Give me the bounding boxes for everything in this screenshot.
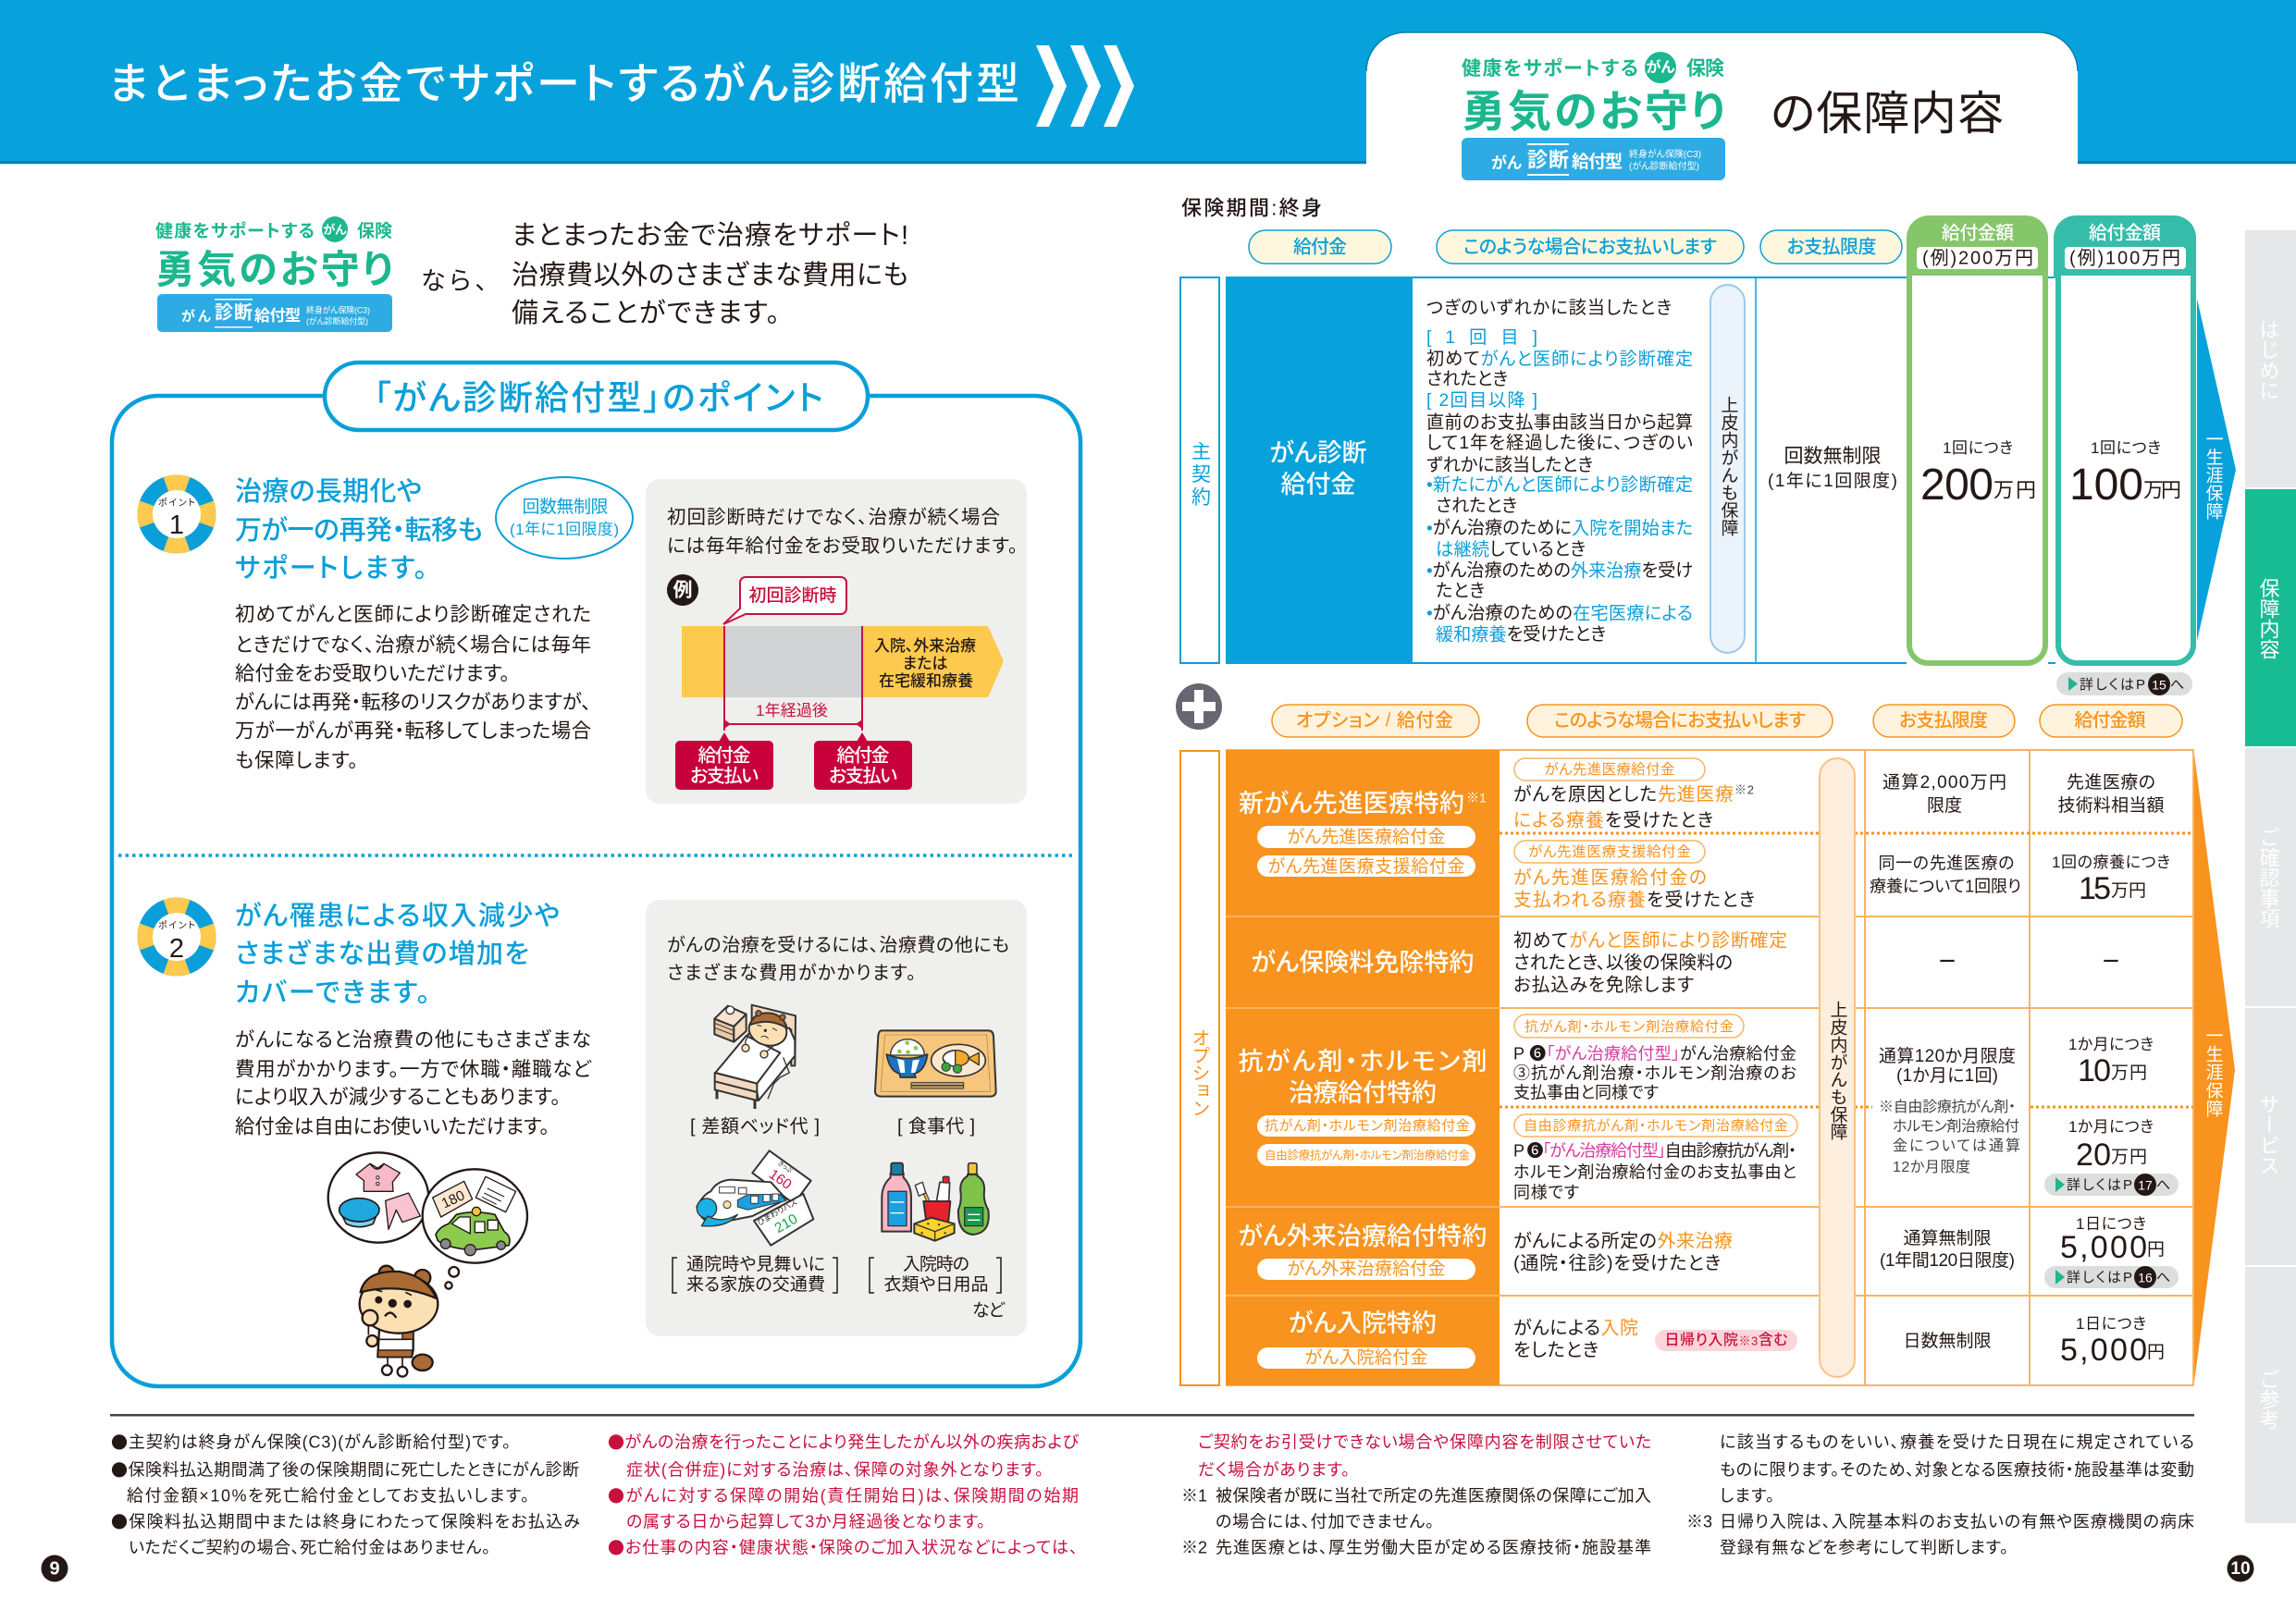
link pill: see page 15 (2056, 672, 2192, 695)
footnotes: column 1: いただくご契約の場合、死亡給付金はありません。 (129, 1539, 490, 1557)
logo: brand mark right: がん (1646, 58, 1675, 76)
panel heading pill: 「がん診断給付型」のポイント (374, 379, 823, 417)
benefit amounts: 5,000 (2060, 1230, 2147, 1265)
pill: carcinoma in situ covered (1710, 285, 1745, 653)
benefit amounts: 円 (2147, 1343, 2165, 1362)
text: なら: なら、 (421, 267, 488, 295)
payment limits: ※自由診療抗がん剤・ (1879, 1099, 2016, 1115)
payment limits: 12か月限度 (1893, 1159, 1970, 1175)
footnotes: column 3: の場合には、付加できません。 (1216, 1513, 1434, 1531)
benefit amounts: 1か月につき (2068, 1036, 2154, 1053)
column: benefit 1 million yen: 給付金額 (2089, 223, 2161, 244)
text: point 1 body: 給付金をお受取りいただけます。 (235, 663, 510, 685)
side tabs (2245, 230, 2296, 1523)
icon: title chevrons (1036, 45, 1134, 127)
icon: point 2 ring: ポイント (158, 920, 195, 931)
heading: point 1 (235, 476, 483, 584)
pill: carcinoma in situ covered: 上皮内がんも保障 (1719, 396, 1738, 536)
logo: brand mark right: 終身がん保険(C3) (1629, 148, 1701, 160)
logo: brand mark left: (がん診断給付型) (306, 315, 368, 326)
tab: coverage active: 保障内容 (2257, 578, 2279, 659)
row header: outpatient rider (1226, 1208, 1500, 1295)
conditions: advanced medical: による療養を受けたとき (1513, 811, 1713, 831)
panel: example timeline: 初回診断時だけでなく、治療が続く場合 (667, 507, 1000, 528)
column: benefit 2 million yen: 給付金額 (1942, 223, 2014, 244)
benefit amounts: 5,000 (2060, 1333, 2147, 1368)
footnotes: column 3 (1181, 1433, 1651, 1557)
conditions: premium waiver: されたとき、以後の保険料の (1513, 953, 1733, 974)
conditions: anticancer: ③抗がん剤治療・ホルモン剤治療のお (1513, 1064, 1796, 1083)
intro text block: まとまったお金で治療をサポート! (512, 220, 908, 251)
heading: point 2: さまざまな出費の増加を (235, 938, 529, 969)
conditions: advanced medical: がん先進医療支援給付金 (1528, 843, 1691, 860)
text: family transport cost: 来る家族の交通費 (686, 1274, 825, 1295)
logo: brand mark right: 勇気のお守り (1462, 87, 1725, 136)
payment limits: 通算無制限 (1904, 1228, 1991, 1248)
cell: payment conditions: されたとき (1436, 497, 1517, 516)
link pill: see page 16: 詳しくはP (2067, 1270, 2132, 1285)
conditions: anticancer: 自由診療抗がん剤・ホルモン剤治療給付金 (1524, 1118, 1788, 1134)
panel: points of cancer diagnosis benefit (112, 363, 1080, 1386)
conditions: outpatient (1513, 1231, 1733, 1274)
link pill: see page 15: 詳しくはP (2080, 677, 2145, 693)
text: differential bed charge: [ 差額ベッド代 ] (690, 1116, 820, 1137)
conditions: premium waiver (1513, 931, 1787, 996)
logo: brand mark left: 終身がん保険(C3) (306, 304, 370, 314)
logo: brand mark right: 健康をサポートする (1462, 58, 1638, 80)
payment box 1: お支払い (690, 766, 759, 787)
label: main contract (1180, 277, 1219, 663)
text: insurance period: 保険期間:終身 (1181, 196, 1322, 219)
footnotes: column 4: 登録有無などを参考にして判断します。 (1720, 1539, 2008, 1557)
row header: anticancer rider: 抗がん剤・ホルモン剤 (1238, 1048, 1487, 1076)
row header: anticancer rider: 自由診療抗がん剤・ホルモン剤治療給付金 (1265, 1148, 1470, 1162)
tab: reference: ご参考 (2257, 1369, 2279, 1430)
callout: unlimited times (496, 477, 633, 559)
conditions: outpatient: (通院・往診)を受けたとき (1513, 1253, 1721, 1274)
tab: reference (2245, 1267, 2296, 1523)
footnotes: column 4: に該当するものをいい、療養を受けた日現在に規定されている (1720, 1433, 2194, 1452)
intro text block: 備えることができます。 (512, 298, 780, 328)
callout: unlimited times: (1年に1回限度) (510, 521, 619, 538)
icon: meal tray (875, 1030, 996, 1097)
conditions: anticancer: 抗がん剤・ホルモン剤治療給付金 (1524, 1019, 1734, 1035)
cell: payment limit: (1年に1回限度) (1768, 471, 1897, 491)
footnotes: column 4: ※3 (1686, 1513, 1712, 1531)
benefit amounts: 技術料相当額 (2057, 795, 2165, 816)
logo: brand mark left: がん (181, 308, 211, 325)
footnotes: column 1: ●保険料払込期間満了後の保険期間に死亡したときにがん診断 (111, 1458, 579, 1482)
payment box 2: お支払い (829, 766, 897, 787)
conditions: anticancer: 同様です (1513, 1184, 1579, 1202)
icon: example badge (667, 574, 698, 606)
label: options: オプション (1189, 1028, 1209, 1117)
tab: services (2245, 1008, 2296, 1265)
conditions: advanced medical: ※2 (1734, 782, 1754, 796)
benefit amounts: 1回の療養につき (2052, 854, 2170, 871)
benefit amounts: 万円 (2111, 881, 2146, 901)
cell: benefit name: がん診断 (1269, 439, 1367, 467)
link pill: see page 15: 15 (2152, 677, 2166, 692)
payment limits: 通算120か月限度 (1879, 1046, 2016, 1066)
icon: train and tickets: 210 (772, 1211, 800, 1236)
row header: hospitalization rider: がん入院給付金 (1304, 1347, 1428, 1368)
conditions: anticancer (1513, 1014, 1797, 1202)
payment limits: ー (1939, 953, 1956, 972)
row header: hospitalization rider: がん入院特約 (1289, 1309, 1437, 1337)
intro text block (512, 220, 908, 328)
footnotes: column 2: ●がんに対する保障の開始(責任開始日)は、保険期間の始期 (608, 1484, 1079, 1508)
logo: brand mark right: (がん診断給付型) (1629, 160, 1699, 172)
column: benefit 2 million yen (1907, 215, 2048, 663)
payment limits: (1か月に1回) (1896, 1066, 1998, 1086)
text: point 1 body: も保障します。 (235, 750, 358, 772)
timeline bar: 1年経過後 (756, 702, 828, 719)
link pill: see page 16: へ (2156, 1270, 2170, 1285)
column headers: options: お支払限度 (1899, 710, 1988, 732)
logo: brand mark left: 診断 (215, 302, 253, 324)
page number 10: 10 (2230, 1559, 2251, 1579)
cell: payment conditions: は継続しているとき (1436, 539, 1586, 559)
column: benefit 2 million yen: 万円 (1994, 478, 2036, 501)
column: benefit 1 million yen: 100 (2069, 461, 2143, 510)
timeline bar (682, 626, 1004, 731)
column headers: options: オプション / 給付金 (1296, 710, 1453, 732)
text: family transport cost: 通院時や見舞いに (686, 1254, 825, 1274)
row header: premium waiver rider (1226, 917, 1500, 1007)
text: point 2 body: 給付金は自由にお使いいただけます。 (235, 1116, 549, 1138)
panel: other expenses (646, 900, 1027, 1336)
column: benefit 1 million yen (2054, 215, 2196, 663)
illustration: worried character with thought bubbles: 180 (439, 1187, 467, 1211)
logo: brand mark left: 給付型 (254, 307, 301, 325)
logo: brand mark right: がん (1491, 154, 1523, 172)
column: benefit 1 million yen: 1回につき (2091, 439, 2161, 457)
cell: payment conditions: 直前のお支払事由該当日から起算 (1426, 412, 1693, 433)
conditions: premium waiver: 初めてがんと医師により診断確定 (1513, 931, 1787, 952)
pill: carcinoma in situ covered options (1820, 758, 1855, 1377)
benefit amounts: 10 (2078, 1053, 2111, 1088)
illustration: worried character with thought bubbles (328, 1152, 527, 1377)
footnotes: column 2: 症状(合併症)に対する治療は、保障の対象外となります。 (626, 1461, 1043, 1480)
footnotes: column 1: 給付金額×10%を死亡給付金としてお支払いします。 (127, 1487, 529, 1506)
column headers: main contract (1249, 230, 1902, 264)
payment box 1: 給付金 (697, 745, 751, 767)
panel heading pill (325, 363, 868, 430)
footnotes: column 1 (111, 1431, 580, 1557)
conditions: anticancer: ホルモン剤治療給付金のお支払事由と (1513, 1163, 1796, 1182)
footnotes: column 2: の属する日から起算して3か月経過後となります。 (626, 1513, 985, 1531)
row header: anticancer rider: 抗がん剤・ホルモン剤治療給付金 (1265, 1118, 1470, 1134)
payment limits: 療養について1回限り (1870, 878, 2021, 896)
cell: payment limit: 回数無制限 (1784, 446, 1882, 467)
benefit amounts: 万円 (2111, 1148, 2147, 1167)
icon: train and tickets (697, 1150, 813, 1246)
conditions: premium waiver: お払込みを免除します (1513, 976, 1694, 996)
tab: introduction: はじめに (2257, 319, 2279, 400)
cell: payment conditions: •新たにがんと医師により診断確定 (1426, 474, 1693, 495)
row header: advanced medical rider: 新がん先進医療特約 (1239, 790, 1464, 818)
icon: point 1 ring (145, 483, 208, 546)
logo: brand mark right: 保険 (1686, 58, 1724, 80)
payment limits (1870, 772, 2021, 1351)
column: benefit 2 million yen: 200 (1920, 461, 1994, 510)
icon: train and tickets: きっぷ (776, 1160, 794, 1174)
footnotes: column 4: ものに限ります。そのため、対象となる医療技術・施設基準は変動 (1720, 1461, 2194, 1480)
icon: hospital bed (714, 1005, 796, 1109)
text: point 1 body (235, 604, 591, 772)
link pill: see page 17: へ (2156, 1177, 2170, 1193)
header band (0, 0, 2296, 165)
text: point 1 body: ときだけでなく、治療が続く場合には毎年 (235, 634, 591, 657)
footnotes: column 4 (1686, 1433, 2194, 1557)
cell: payment conditions: [ 1 回 目 ] (1426, 328, 1537, 348)
footnotes: column 2: ●がんの治療を行ったことにより発生したがん以外の疾病および (608, 1431, 1080, 1455)
logo: brand mark right: 給付型 (1572, 152, 1623, 172)
page number 10 (2228, 1555, 2253, 1581)
cell: payment conditions: 初めてがんと医師により診断確定 (1426, 349, 1693, 369)
text: point 2 body: 費用がかかります。一方で休職・離職など (235, 1059, 592, 1081)
tab: confirmation (2245, 748, 2296, 1006)
link pill: see page 16: 16 (2138, 1270, 2153, 1285)
tab: introduction (2245, 230, 2296, 487)
cell: payment conditions: つぎのいずれかに該当したとき (1426, 298, 1672, 318)
icon: point 1 ring: 1 (169, 510, 184, 540)
heading: point 2: がん罹患による収入減少や (235, 901, 560, 931)
footnotes: column 3: 被保険者が既に当社で所定の先進医療関係の保障にご加入 (1216, 1487, 1651, 1506)
callout: first diagnosis: 初回診断時 (749, 585, 836, 606)
payment limits: (1年間120日限度) (1880, 1250, 2015, 1271)
conditions: advanced medical (1513, 758, 1755, 911)
icon: daily goods (882, 1163, 989, 1241)
footnotes: column 2 (608, 1431, 1080, 1560)
heading: point 2: カバーできます。 (235, 978, 430, 1008)
text: family transport cost (673, 1254, 837, 1295)
text: clothes and daily goods: 入院時の (903, 1254, 969, 1274)
row header: hospitalization rider (1226, 1297, 1500, 1385)
heading: point 1: 万が一の再発・転移も (235, 515, 483, 546)
payment limits: 限度 (1927, 795, 1962, 816)
intro text block: 治療費以外のさまざまな費用にも (512, 260, 908, 290)
table: options (1180, 750, 2235, 1385)
payment limits: ホルモン剤治療給付 (1893, 1118, 2019, 1135)
arrow: lifetime coverage orange: 一生涯保障 (2203, 1027, 2223, 1117)
footnotes: column 3: 先進医療とは、厚生労働大臣が定める医療技術・施設基準 (1216, 1539, 1651, 1557)
benefit amounts: 1か月につき (2068, 1118, 2154, 1136)
cell: payment conditions: されたとき (1426, 370, 1508, 389)
conditions: advanced medical: がん先進医療給付金 (1544, 761, 1674, 778)
column: benefit 2 million yen: (例)200万円 (1922, 248, 2033, 269)
conditions: hospitalization: をしたとき (1513, 1341, 1599, 1361)
cell: payment conditions: •がん治療のための外来治療を受け (1426, 560, 1693, 581)
benefit amounts: 1日につき (2076, 1315, 2146, 1333)
icon: example badge: 例 (673, 580, 692, 601)
row header: outpatient rider: がん外来治療給付特約 (1238, 1223, 1487, 1250)
cell: payment conditions: ずれかに該当したとき (1426, 455, 1593, 475)
footnotes: column 1: ●主契約は終身がん保険(C3)(がん診断給付型)です。 (111, 1431, 511, 1455)
cell: payment conditions: •がん治療のための在宅医療による (1426, 603, 1693, 623)
panel: example timeline (646, 479, 1027, 804)
icon: point 2 ring (145, 905, 208, 968)
row header: advanced medical rider: ※1 (1466, 790, 1487, 805)
pill: carcinoma in situ covered options: 上皮内がんも保障 (1828, 1001, 1847, 1140)
page title: まとまったお金でサポートするがん診断給付型 (108, 59, 1019, 108)
timeline bar: または (903, 655, 947, 672)
benefit amounts (2052, 772, 2170, 1368)
panel: example timeline: には毎年給付金をお受取りいただけます。 (667, 535, 1018, 557)
footnotes: column 3: ご契約をお引受けできない場合や保障内容を制限させていた (1198, 1433, 1651, 1452)
conditions: anticancer: P ❻「がん治療給付型」自由診療抗がん剤・ (1513, 1142, 1796, 1161)
footnotes: column 1: ●保険料払込期間中または終身にわたって保険料をお払込み (111, 1510, 580, 1534)
link pill: see page 17: 詳しくはP (2067, 1177, 2132, 1193)
benefit amounts: 万円 (2111, 1064, 2147, 1083)
panel: other expenses: がんの治療を受けるには、治療費の他にも (667, 935, 1009, 956)
column: benefit 2 million yen: 1回につき (1943, 439, 2013, 457)
logo: brand mark right: 診断 (1527, 148, 1569, 171)
footnotes: column 4: 日帰り入院は、入院基本料のお支払いの有無や医療機関の病床 (1720, 1513, 2194, 1531)
conditions: anticancer: 支払事由と同様です (1513, 1084, 1659, 1102)
text: clothes and daily goods: 衣類や日用品 (884, 1274, 988, 1295)
conditions: advanced medical: がん先進医療給付金の (1513, 868, 1707, 889)
icon: plus (1176, 683, 1222, 730)
payment limits: 日数無制限 (1904, 1331, 1991, 1351)
text: point 1 body: 万が一がんが再発・転移してしまった場合 (235, 720, 591, 743)
text: clothes and daily goods: など (972, 1300, 1006, 1321)
arrow: lifetime coverage blue: 一生涯保障 (2203, 430, 2223, 520)
link pill: see page 17 (2044, 1174, 2179, 1196)
link pill: see page 15: へ (2170, 677, 2184, 693)
icon: train and tickets: ひまわりバス (756, 1198, 798, 1227)
logo: brand mark right (1462, 52, 1725, 180)
tab: services: サービス (2257, 1094, 2279, 1175)
column headers: main contract: お支払限度 (1787, 237, 1876, 258)
link pill: see page 16 (2044, 1266, 2179, 1288)
cell: payment conditions: [ 2回目以降 ] (1426, 390, 1537, 411)
benefit amounts: 円 (2147, 1240, 2165, 1260)
column headers: options (1272, 705, 2182, 737)
timeline bar: 在宅緩和療養 (879, 672, 973, 690)
text: point 2 body (235, 1028, 592, 1138)
column headers: options: 給付金額 (2074, 710, 2146, 732)
row header: premium waiver rider: がん保険料免除特約 (1251, 949, 1475, 977)
row header: anticancer rider: 治療給付特約 (1289, 1079, 1437, 1107)
logo: brand mark left: 勇気のお守り (155, 248, 393, 291)
payment limits: 同一の先進医療の (1878, 855, 2015, 873)
conditions: hospitalization (1513, 1318, 1797, 1361)
table: main contract (1180, 215, 2236, 663)
conditions: outpatient: がんによる所定の外来治療 (1513, 1231, 1733, 1252)
text: point 2 body: により収入が減少することもあります。 (235, 1087, 561, 1109)
text: meal cost: [ 食事代 ] (897, 1116, 975, 1137)
logo: brand mark left: 健康をサポートする (155, 220, 315, 241)
cell: payment conditions: して1年を経過した後に、つぎのい (1426, 433, 1693, 453)
tab: confirmation: ご確認事項 (2257, 827, 2279, 928)
heading: point 2 (235, 901, 560, 1008)
benefit amounts: ー (2103, 953, 2119, 972)
cell: benefit name (1226, 277, 1413, 663)
cell: payment conditions: •がん治療のために入院を開始また (1426, 518, 1693, 538)
row header: advanced medical rider: がん先進医療給付金 (1288, 827, 1445, 847)
footnotes: column 3: ※2 (1181, 1539, 1207, 1557)
cell: payment limit (1768, 446, 1897, 491)
payment limits: 通算2,000万円 (1882, 772, 2006, 793)
conditions: hospitalization: 日帰り入院※3含む (1665, 1332, 1787, 1348)
arrow: lifetime coverage orange (2194, 754, 2235, 1383)
benefit amounts: 1日につき (2076, 1215, 2146, 1233)
column headers: main contract: 給付金 (1293, 237, 1347, 258)
text: point 1 body: 初めてがんと医師により診断確定された (235, 604, 591, 626)
payment limits: 金については通算 (1893, 1137, 2020, 1154)
logo: brand mark left (155, 216, 393, 332)
text: point 1 body: がんには再発・転移のリスクがありますが、 (235, 692, 591, 714)
icon: point 2 ring: 2 (169, 934, 184, 964)
benefit amounts: 15 (2079, 871, 2111, 906)
row header: advanced medical rider (1226, 750, 1500, 916)
panel: other expenses: さまざまな費用がかかります。 (667, 962, 916, 984)
callout: first diagnosis (723, 577, 846, 624)
logo: brand mark left: がん (323, 223, 347, 237)
column: benefit 1 million yen: (例)100万円 (2069, 248, 2180, 269)
tab: coverage active (2245, 489, 2296, 746)
row header: anticancer rider (1226, 1009, 1500, 1206)
logo: brand mark left: 保険 (357, 221, 392, 241)
icon: train and tickets: 160 (766, 1166, 795, 1193)
callout: unlimited times: 回数無制限 (522, 497, 609, 517)
row header: advanced medical rider: がん先進医療支援給付金 (1267, 856, 1465, 877)
cell: payment conditions (1426, 298, 1693, 645)
label: options (1180, 751, 1219, 1385)
column: benefit 1 million yen: 万円 (2143, 478, 2181, 501)
page number 9 (41, 1555, 68, 1581)
conditions: anticancer: P ❻「がん治療給付型」がん治療給付金 (1513, 1045, 1796, 1064)
text: clothes and daily goods (870, 1254, 1006, 1321)
arrow: lifetime coverage blue (2197, 299, 2236, 641)
benefit amounts: 20 (2076, 1137, 2111, 1173)
footnotes: column 3: ※1 (1181, 1487, 1207, 1506)
page number 9: 9 (49, 1559, 60, 1580)
cell: payment conditions: 緩和療養を受けたとき (1436, 624, 1606, 645)
cell: payment conditions: たとき (1436, 582, 1485, 601)
footnotes: column 4: します。 (1720, 1487, 1774, 1506)
row header: outpatient rider: がん外来治療給付金 (1288, 1259, 1445, 1279)
benefit amounts: 先進医療の (2067, 772, 2155, 793)
text: point 2 body: がんになると治療費の他にもさまざまな (235, 1028, 591, 1051)
conditions: advanced medical: がんを原因とした先進医療 (1513, 785, 1734, 805)
column headers: main contract: このような場合にお支払いします (1463, 237, 1717, 258)
conditions: hospitalization: がんによる入院 (1513, 1318, 1638, 1339)
label: main contract: 主契約 (1190, 441, 1211, 506)
header tab: coverage title: の保障内容 (1771, 88, 2004, 140)
heading: point 1: サポートします。 (235, 553, 427, 584)
timeline bar: 入院、外来治療 (874, 637, 976, 655)
conditions: advanced medical: 支払われる療養を受けたとき (1513, 891, 1755, 911)
payment box 2 (814, 732, 912, 790)
payment box 2: 給付金 (836, 745, 890, 767)
link pill: see page 17: 17 (2138, 1177, 2153, 1192)
header tab: coverage title (1366, 32, 2078, 180)
column headers: options: このような場合にお支払いします (1554, 710, 1806, 732)
footnotes: column 3: だく場合があります。 (1198, 1461, 1350, 1480)
icon: point 1 ring: ポイント (158, 498, 195, 509)
cell: benefit name: 給付金 (1280, 471, 1356, 498)
footnotes: column 2: ●お仕事の内容・健康状態・保険のご加入状況などによっては、 (608, 1536, 1078, 1560)
payment box 1 (675, 732, 773, 790)
heading: point 1: 治療の長期化や (235, 476, 422, 507)
